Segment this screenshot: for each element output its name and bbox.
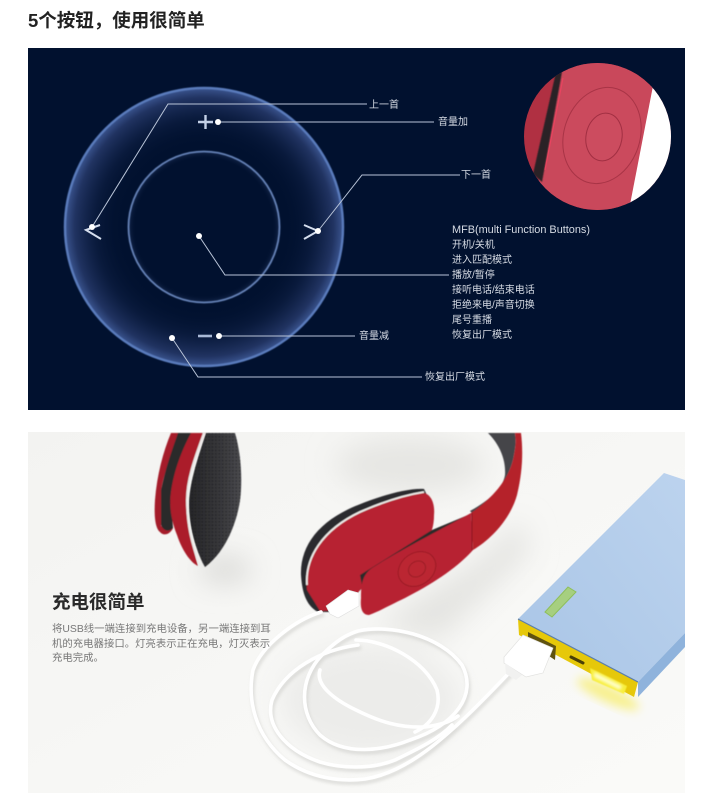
title: 5个按钮，使用很简单 — [28, 10, 205, 31]
cable — [251, 612, 511, 783]
icon: next — [304, 225, 318, 239]
label: MFB function list: 接听电话/结束电话 — [452, 283, 535, 296]
icon: minus — [198, 335, 212, 337]
power bank logo — [545, 587, 576, 617]
label: MFB function list: 开机/关机 — [452, 238, 495, 251]
charging description — [52, 622, 271, 664]
panel: button diagram — [28, 48, 685, 410]
label: next track: 下一首 — [461, 168, 491, 181]
inner band — [470, 433, 516, 513]
micro USB port — [571, 657, 583, 663]
icon: plus — [198, 115, 213, 129]
soft shadows — [199, 437, 530, 755]
left earcup — [155, 433, 241, 567]
USB port — [528, 632, 556, 660]
label: previous track: 上一首 — [369, 98, 399, 111]
label: MFB function list: 恢复出厂模式 — [452, 328, 512, 341]
label: volume down: 音量减 — [359, 329, 389, 342]
callout lines — [92, 104, 460, 377]
outer band — [471, 433, 522, 550]
charging heading: 充电很简单 — [52, 592, 145, 612]
charging description: 充电完成。 — [52, 651, 104, 664]
LED lights — [590, 668, 627, 694]
label: volume up: 音量加 — [438, 115, 468, 128]
label: MFB function list: 尾号重播 — [452, 313, 492, 326]
charging plug at headphone — [326, 590, 359, 618]
charging description: 机的充电器接口。灯亮表示正在充电，灯灭表示 — [52, 637, 270, 650]
ear cup — [301, 489, 434, 612]
label: MFB function list: 进入匹配模式 — [452, 253, 512, 266]
panel: charging photo — [28, 432, 685, 793]
centre headphone band and earcup — [301, 433, 522, 615]
power bank — [504, 473, 685, 716]
label: factory reset: 恢复出厂模式 — [425, 370, 485, 383]
icon: previous — [86, 225, 101, 239]
label: MFB function list — [452, 224, 590, 341]
callout dots — [89, 119, 321, 341]
label: MFB function list: 播放/暂停 — [452, 268, 495, 281]
ring diagram — [65, 88, 343, 366]
charging description: 将USB线一端连接到充电设备，另一端连接到耳 — [52, 622, 271, 635]
USB plug — [504, 635, 553, 677]
button slider — [361, 513, 473, 615]
label: MFB function list: MFB(multi Function Buttons) — [452, 224, 590, 236]
label: MFB function list: 拒绝来电/声音切换 — [452, 298, 535, 311]
detail lens: headphone button close-up — [524, 63, 671, 210]
